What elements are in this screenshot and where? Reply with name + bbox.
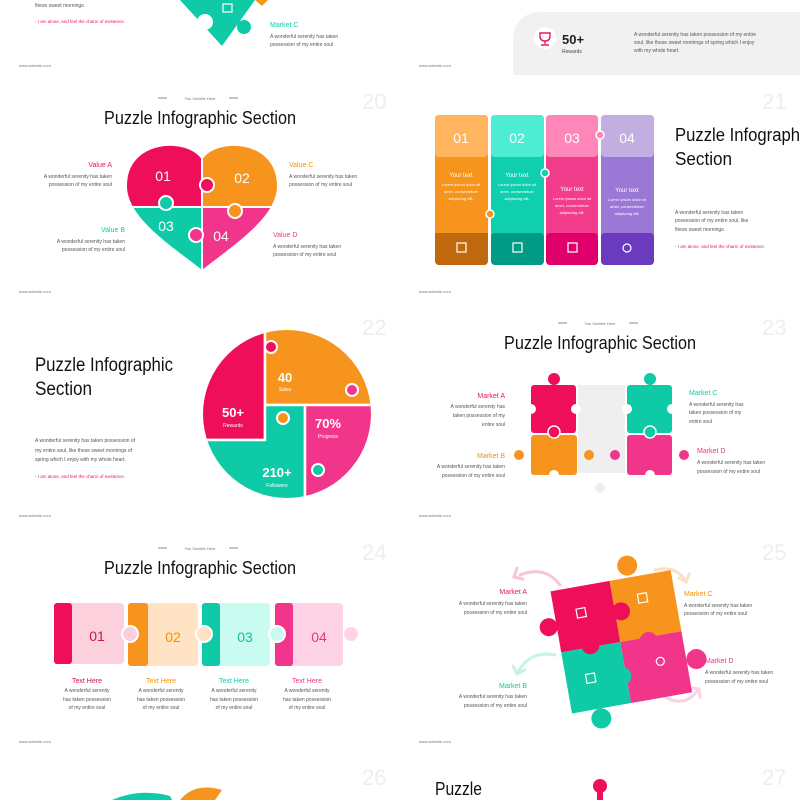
slide 21: columns: possession of my entire soul, like [675,218,749,224]
slide: top-right partial: soul, like these sweet mornings of spring which I enjoy [634,40,755,46]
slide 24: horizontal puzzle: www.website.com [19,739,51,744]
heart: 03 [158,218,174,234]
slide 22: circle puzzle: A wonderful serenity has taken possession of [35,438,136,444]
slide 20: heart puzzle: Value D [273,232,297,239]
slide 24: horizontal puzzle: of my entire soul [143,705,179,711]
slide 24: horizontal puzzle: of my entire soul [216,705,252,711]
column 03 [546,115,598,265]
column 03: amet, consectetuer [555,203,590,208]
slide 23: market puzzle: A wonderful serenity has taken [437,464,505,470]
slide: top-right partial: with my whole heart. [634,48,680,54]
slide 22: circle puzzle: spring which I enjoy with my whole heart. [35,457,126,463]
slide: top-left partial: A wonderful serenity has taken [270,34,338,40]
column 01: Lorem ipsum dolor sit [442,182,481,187]
title: Puzzle Infographic Section [104,108,296,128]
column 04: Your text [615,188,639,194]
slide: top-left partial: Market C [270,22,298,29]
pieces: 04 [311,629,327,645]
pieces: 02 [165,629,181,645]
slide 25: rotated puzzle: Market B [499,683,527,690]
slide 24: horizontal puzzle: A wonderful serenity [211,688,257,694]
slide 25: rotated puzzle: possession of my entire soul [705,679,768,685]
slide 21: columns: - I am alone, and feel the charm of existence. [675,244,765,249]
slide: top-right partial [419,12,800,75]
slide 25: rotated puzzle: A wonderful serenity has taken [459,601,527,607]
slide 20: heart puzzle: possession of my entire soul [49,182,112,188]
slide 23: market puzzle: taken possession of my [453,413,505,419]
slide 23: market puzzle: Market B [477,453,505,460]
column 01: 01 [453,130,469,146]
column 03: adipiscing elit. [559,210,585,215]
slide 23: market puzzle: A wonderful serenity has [451,404,505,410]
column 03: Your text [560,187,584,193]
slide: top-left partial: - I am alone, and feel the charm of existence. [35,19,125,24]
heart: 02 [234,170,250,186]
slide 24: horizontal puzzle: has taken possession [283,697,331,703]
column 01: amet, consectetuer [444,189,479,194]
pieces: 01 [89,628,105,644]
column 04: adipiscing elit. [614,211,640,216]
slide 22: circle puzzle: - I am alone, and feel the charm of existence. [35,474,125,479]
slide 24: horizontal puzzle [19,540,386,744]
column 04: amet, consectetuer [610,204,645,209]
slide 20: heart puzzle: 20 [362,89,386,114]
slide: top-left partial: these sweet mornings. [35,3,85,9]
slide 24: horizontal puzzle: has taken possession [63,697,111,703]
slide 25: rotated puzzle: A wonderful serenity has taken [705,670,773,676]
puzzle pieces [514,373,689,493]
column 03: 03 [564,130,580,146]
slide 22: circle puzzle [19,315,386,518]
circle chart [200,328,375,505]
slide 24: horizontal puzzle: Text Here [72,678,102,685]
slide 24: horizontal puzzle: of my entire soul [69,705,105,711]
column 01 [435,115,488,265]
column 02: adipiscing elit. [504,196,530,201]
slide 25: rotated puzzle: Market A [499,589,527,596]
slide 23: market puzzle: entire soul [482,422,505,428]
slide 24: horizontal puzzle: A wonderful serenity [64,688,110,694]
slide 20: heart puzzle: Value A [88,162,112,169]
slide: top-right partial: www.website.com [419,63,451,68]
slide 20: heart puzzle: possession of my entire soul [273,252,336,258]
slide 23: market puzzle: possession of my entire soul [442,473,505,479]
slide 25: rotated puzzle: Market C [684,591,712,598]
slide 24: horizontal puzzle: Text Here [146,678,176,685]
circle chart: Progress [318,434,338,440]
slide 23: market puzzle [419,315,786,518]
slide 25: rotated puzzle: www.website.com [419,739,451,744]
slide 22: circle puzzle: www.website.com [19,513,51,518]
slide 21: columns: Section [675,149,732,169]
circle chart: Followers [266,483,288,489]
slide 20: heart puzzle: A wonderful serenity has taken [273,244,341,250]
slide 25: rotated puzzle: A wonderful serenity has taken [459,694,527,700]
heart: 01 [155,168,171,184]
circle chart: 50+ [222,405,244,420]
pieces [54,603,358,666]
slide: top-right partial: 50+ [562,32,584,47]
slide 24: horizontal puzzle: has taken possession [137,697,185,703]
slide 24: horizontal puzzle: 24 [362,540,386,565]
slide 23: market puzzle: taken possession of my [689,410,742,416]
slide 23: market puzzle: Puzzle Infographic Section [504,333,696,353]
slide 24: horizontal puzzle: A wonderful serenity [284,688,330,694]
circle chart: 210+ [262,465,292,480]
slide 23: market puzzle: 23 [762,315,786,340]
slide 25: rotated puzzle: possession of my entire soul [464,610,527,616]
column 04: Lorem ipsum dolor sit [608,197,647,202]
slide 23: market puzzle: Market C [689,390,717,397]
slide 21: columns [419,89,800,294]
slide 21: columns: www.website.com [419,289,451,294]
slide 20: heart puzzle: Value B [101,227,125,234]
slide 20: heart puzzle: possession of my entire soul [62,247,125,253]
slide 20: heart puzzle [19,89,386,294]
circle chart: 70% [315,416,341,431]
heart: 04 [213,228,229,244]
arrows [513,568,700,701]
slide 24: horizontal puzzle: Puzzle Infographic Section [104,558,296,578]
column 02: 02 [509,130,525,146]
slide 26 partial: 26 [362,765,386,790]
slide 25: rotated puzzle: possession of my entire soul [464,703,527,709]
slide 22: circle puzzle: Section [35,379,92,400]
slide: top-right partial: Rewards [562,49,582,55]
slide 20: heart puzzle: A wonderful serenity has taken [44,174,112,180]
circle chart: Sales [279,387,292,393]
slide 25: rotated puzzle: 25 [762,540,786,565]
puzzle diamond teal [180,0,268,46]
slide 22: circle puzzle: Puzzle Infographic [35,355,173,376]
slide 24: horizontal puzzle: of my entire soul [289,705,325,711]
slide 24: horizontal puzzle: Text Here [292,678,322,685]
slide 20: heart puzzle: www.website.com [19,289,51,294]
pieces: 03 [237,629,253,645]
slide 23: market puzzle: A wonderful serenity has [689,402,744,408]
column 04: 04 [619,130,635,146]
column 02 [491,115,544,265]
slide: top-right partial: A wonderful serenity has taken possession of my entire [634,32,756,38]
slide 25: rotated puzzle: A wonderful serenity has taken [684,603,752,609]
column 02: amet, consectetuer [500,189,535,194]
column 01: Your text [449,173,473,179]
slide 21: columns: these sweet mornings. [675,227,725,233]
slide 25: rotated puzzle: Market D [705,658,733,665]
slide 23: market puzzle: entire soul [689,419,712,425]
slide: top-left partial [19,0,338,68]
slide 23: market puzzle: Market A [477,393,505,400]
column 02: Your text [505,173,529,179]
circle chart: Rewards [223,423,243,429]
column 03: Lorem ipsum dolor sit [553,196,592,201]
slide 27 partial [435,765,786,800]
column 02: Lorem ipsum dolor sit [498,182,537,187]
slide 20: heart puzzle: You Subtitle Here [185,96,216,101]
slide 20: heart puzzle: A wonderful serenity has taken [289,174,357,180]
slide 22: circle puzzle: 22 [362,315,386,340]
slide: top-left partial: www.website.com [19,63,51,68]
slide 27 partial: 27 [762,765,786,790]
slide 23: market puzzle: www.website.com [419,513,451,518]
slide 20: heart puzzle: possession of my entire soul [289,182,352,188]
column 01: adipiscing elit. [448,196,474,201]
icon: trophy [534,27,556,49]
slide 21: columns: 21 [762,89,786,114]
slide 25: rotated puzzle [419,540,786,744]
slide 24: horizontal puzzle: You Subtitle Here [185,546,216,551]
heart [127,146,277,270]
slide 21: columns: A wonderful serenity has taken [675,210,743,216]
slide: top-left partial: possession of my entire soul [270,42,333,48]
slide 23: market puzzle: You Subtitle Here [585,321,616,326]
slide 25: rotated puzzle: possession of my entire soul [684,611,747,617]
slide 20: heart puzzle: Value C [289,162,313,169]
slide 23: market puzzle: possession of my entire soul [697,469,760,475]
slide 23: market puzzle: A wonderful serenity has taken [697,460,765,466]
puzzle [530,545,715,736]
column 04 [601,115,654,265]
slide 24: horizontal puzzle: has taken possession [210,697,258,703]
slide 20: heart puzzle: A wonderful serenity has taken [57,239,125,245]
slide 27 partial: Puzzle [435,779,482,799]
slide 22: circle puzzle: my entire soul, like these sweet mornings of [35,448,133,454]
circle chart: 40 [278,370,292,385]
slide 23: market puzzle: Market D [697,448,725,455]
slide 24: horizontal puzzle: A wonderful serenity [138,688,184,694]
slide 26 partial [112,765,386,800]
slide 24: horizontal puzzle: Text Here [219,678,249,685]
